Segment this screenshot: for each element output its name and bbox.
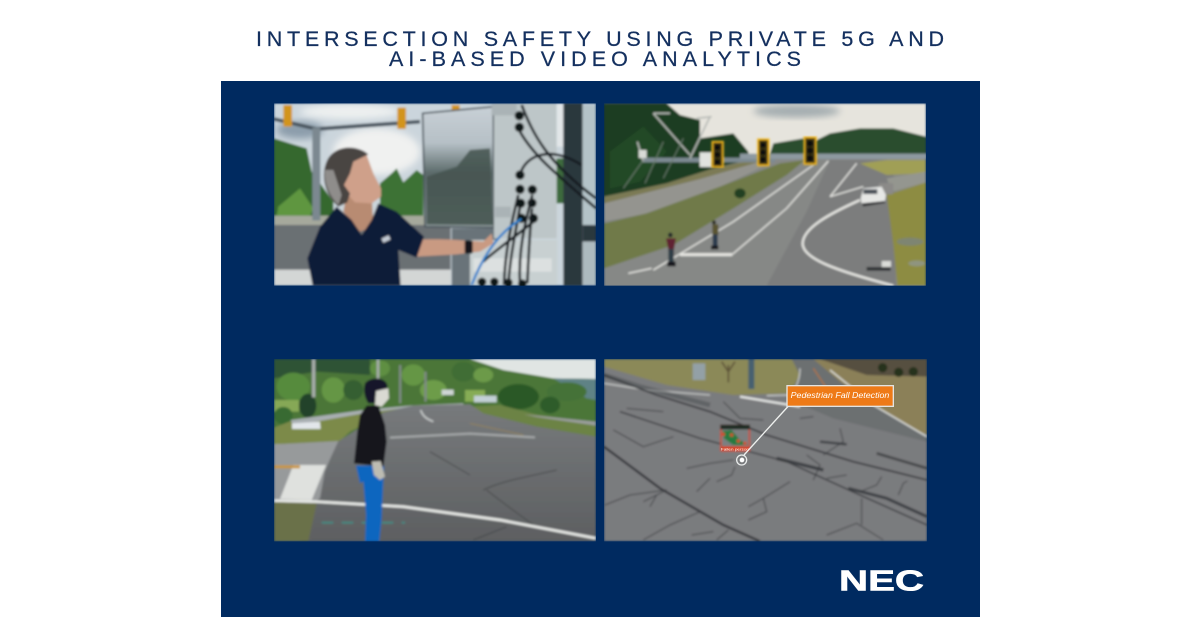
logo: NEC: NEC xyxy=(839,566,924,598)
callout: pedestrian fall detection xyxy=(787,386,893,406)
connectors xyxy=(478,111,538,288)
road markings xyxy=(628,161,893,286)
detected person box xyxy=(720,425,750,451)
traffic signals with yellow outlines xyxy=(712,137,816,167)
callout leader and target marker xyxy=(737,405,789,465)
photo: pedestrian mannequin beside road xyxy=(274,359,596,541)
photo: technician at roadside cabinet xyxy=(274,103,596,288)
man xyxy=(417,233,493,257)
title: INTERSECTION SAFETY USING PRIVATE 5G AND xyxy=(256,27,944,51)
cars xyxy=(878,183,893,194)
riders xyxy=(666,237,677,252)
mannequin xyxy=(356,466,384,541)
cables xyxy=(483,105,596,285)
panel: navy background xyxy=(221,81,980,617)
title xyxy=(256,27,944,71)
photo: riders crossing road under traffic signals xyxy=(604,103,927,288)
title: AI-BASED VIDEO ANALYTICS xyxy=(389,47,801,71)
pavement joints and cracks xyxy=(604,375,927,541)
photo: overhead view with AI fall detection overlay: Fallen person xyxy=(721,446,749,451)
callout: pedestrian fall detection: Pedestrian Fall Detection xyxy=(791,391,890,400)
photo: overhead view with AI fall detection overlay xyxy=(604,359,927,541)
